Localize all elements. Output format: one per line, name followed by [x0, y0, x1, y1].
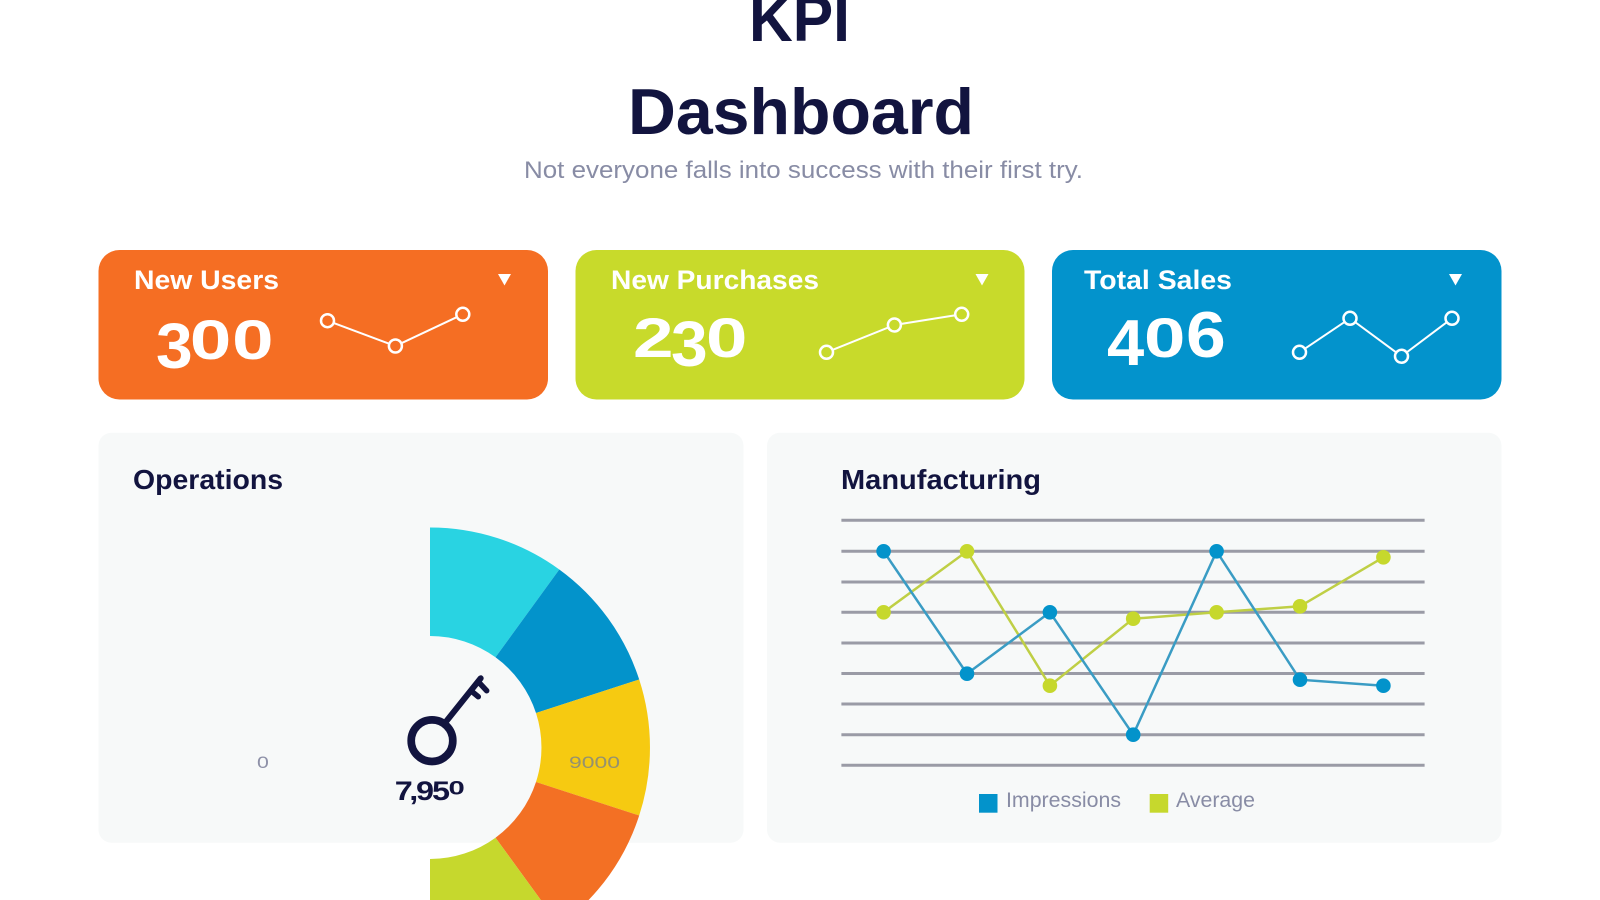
- panel: New Users: [98, 250, 548, 400]
- panel: Total Sales: [1052, 250, 1502, 400]
- gauge chart: [430, 528, 650, 900]
- legend: [979, 788, 1255, 813]
- series: Impressions: [876, 544, 1391, 742]
- series: Average: [876, 544, 1391, 693]
- gauge value: 7,950: 9: [416, 776, 434, 806]
- heading: Total Sales: Total Sales: [1084, 265, 1232, 295]
- sparkline: [820, 308, 968, 359]
- value: 300: 3: [156, 310, 193, 382]
- value: 300: 0: [232, 308, 274, 371]
- gauge value: 7,950: 0: [448, 778, 465, 799]
- value: 300: [156, 308, 274, 382]
- heading: Operations: Operations: [133, 464, 283, 495]
- icon: key: [411, 678, 487, 762]
- value: 230: 2: [633, 306, 673, 369]
- title: [628, 0, 974, 148]
- gauge value: 7,950: 7: [395, 776, 413, 806]
- gauge value: 7,950: 5: [432, 776, 450, 806]
- legend: Average: [1176, 788, 1255, 812]
- value: 230: 3: [671, 308, 708, 380]
- value: 406: [1107, 299, 1226, 379]
- heading: New Purchases: New Purchases: [611, 265, 819, 295]
- heading: Manufacturing: Manufacturing: [841, 464, 1041, 495]
- value: 300: 0: [190, 308, 231, 371]
- gauge value: 7,950: [395, 776, 465, 806]
- heading: New Users: New Users: [134, 265, 279, 295]
- value: 406: 6: [1186, 299, 1226, 371]
- panel: Operations: [98, 433, 744, 900]
- icon: dropdown triangle: [976, 274, 988, 286]
- line chart: [841, 520, 1425, 765]
- title: Dashboard: [628, 75, 974, 148]
- value: 406: 4: [1107, 306, 1145, 379]
- legend: Impressions: [1006, 788, 1121, 812]
- sparkline: [1293, 312, 1458, 363]
- subtitle: Not everyone falls into success with their first try.: [524, 157, 1083, 184]
- icon: dropdown triangle: [498, 274, 511, 286]
- gauge min label: 0: [257, 754, 269, 772]
- gauge value: 7,950: ,: [409, 776, 418, 806]
- panel: Manufacturing: [767, 433, 1502, 843]
- icon: dropdown triangle: [1449, 274, 1462, 286]
- gauge max label: 9000: [569, 753, 620, 772]
- value: 406: 0: [1144, 306, 1185, 369]
- panel: New Purchases: [576, 250, 1024, 400]
- value: 230: [633, 306, 747, 380]
- value: 230: 0: [706, 306, 747, 369]
- sparkline: [321, 308, 469, 352]
